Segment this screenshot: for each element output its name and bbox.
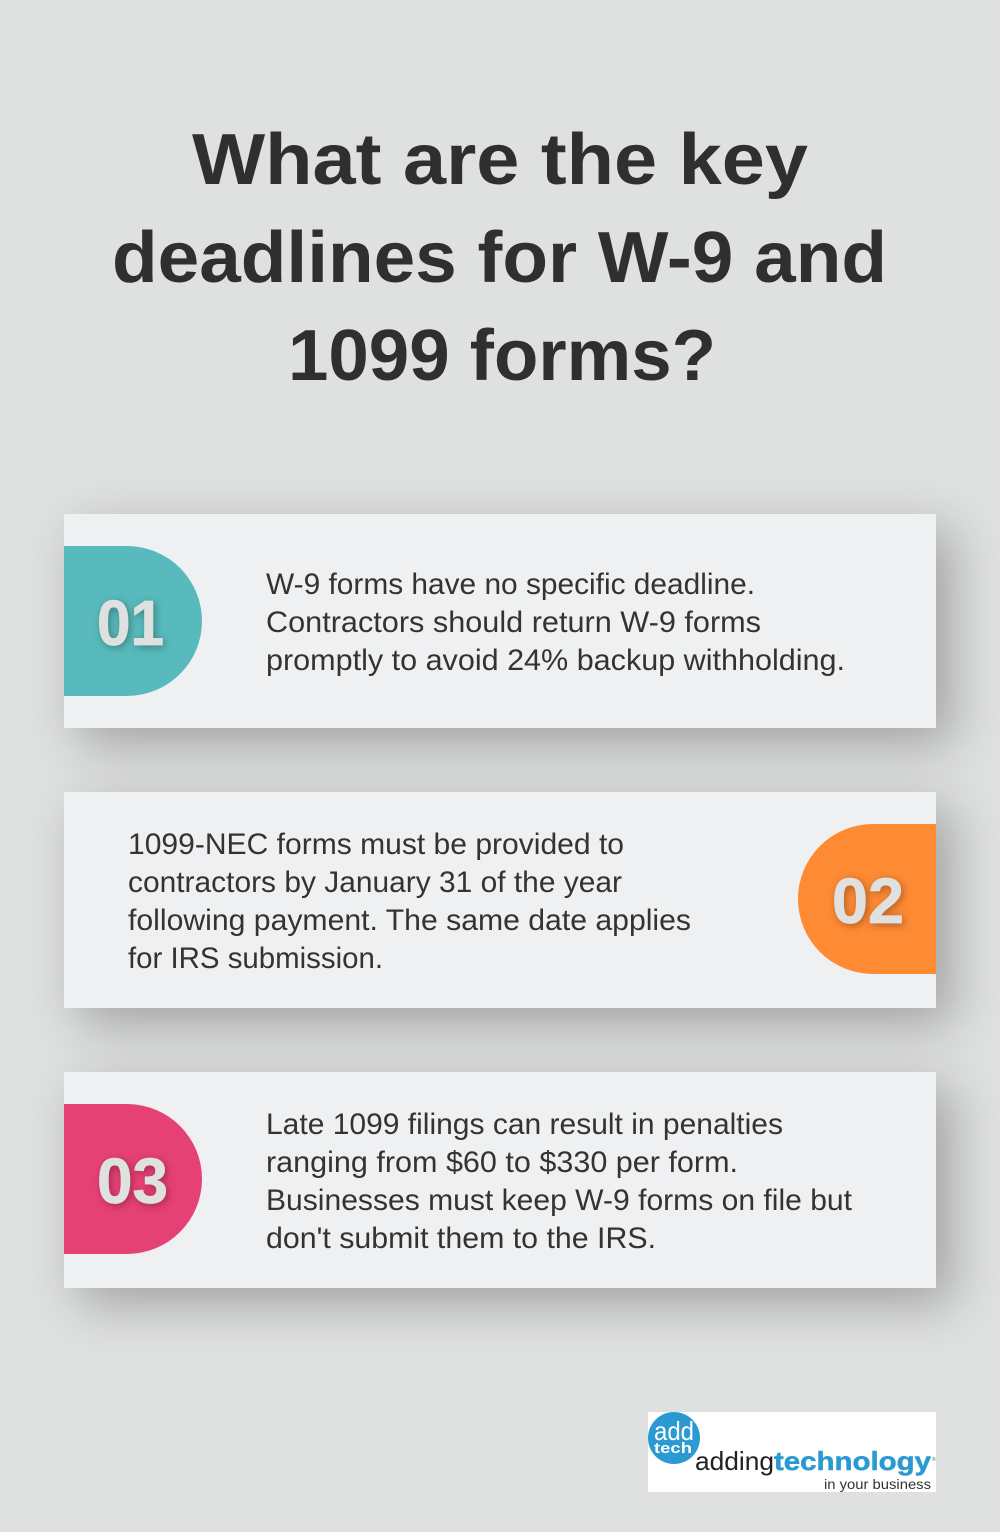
text: step 02: contractors by January 31 of the year xyxy=(128,866,622,899)
text: step 01: Contractors should return W-9 forms xyxy=(266,606,761,639)
panel: step 02 xyxy=(64,792,936,1008)
icon: add tech circle: add xyxy=(654,1416,694,1446)
panel: step 03 xyxy=(64,1072,936,1288)
text: step 03: don't submit them to the IRS. xyxy=(266,1222,656,1255)
title: deadlines for W-9 and xyxy=(112,218,887,298)
logo: adding technology xyxy=(648,1412,936,1492)
logo wordmark: ® xyxy=(932,1456,936,1463)
title: What are the key xyxy=(192,120,808,200)
text: step 03: Businesses must keep W-9 forms on file but xyxy=(266,1184,852,1217)
icon: add tech circle: tech xyxy=(654,1440,692,1457)
badge: 03: 03 xyxy=(97,1145,168,1217)
logo wordmark: in your business xyxy=(824,1476,931,1492)
badge: 01: 01 xyxy=(97,587,164,659)
badge: 03 xyxy=(64,1104,202,1254)
text: step 02: following payment. The same date applies xyxy=(128,904,691,937)
title xyxy=(112,120,887,396)
logo wordmark: technology xyxy=(774,1446,932,1476)
text: step 02: 1099-NEC forms must be provided to xyxy=(128,828,624,861)
text: step 02: for IRS submission. xyxy=(128,942,383,975)
panel: step 01 xyxy=(64,514,936,728)
badge: 01 xyxy=(64,546,202,696)
text: step 01: W-9 forms have no specific deadline. xyxy=(266,568,755,601)
badge: 02 xyxy=(798,824,936,974)
title: 1099 forms? xyxy=(288,316,716,396)
text: step 03 xyxy=(266,1108,852,1255)
text: step 03: Late 1099 filings can result in penalties xyxy=(266,1108,783,1141)
text: step 01: promptly to avoid 24% backup withholding. xyxy=(266,644,845,677)
text: step 02 xyxy=(128,828,691,975)
icon: add tech circle xyxy=(648,1412,700,1464)
badge: 02: 02 xyxy=(832,865,904,937)
text: step 03: ranging from $60 to $330 per form. xyxy=(266,1146,738,1179)
text: step 01 xyxy=(266,568,845,677)
logo wordmark: adding xyxy=(695,1446,774,1476)
logo wordmark xyxy=(695,1446,936,1492)
